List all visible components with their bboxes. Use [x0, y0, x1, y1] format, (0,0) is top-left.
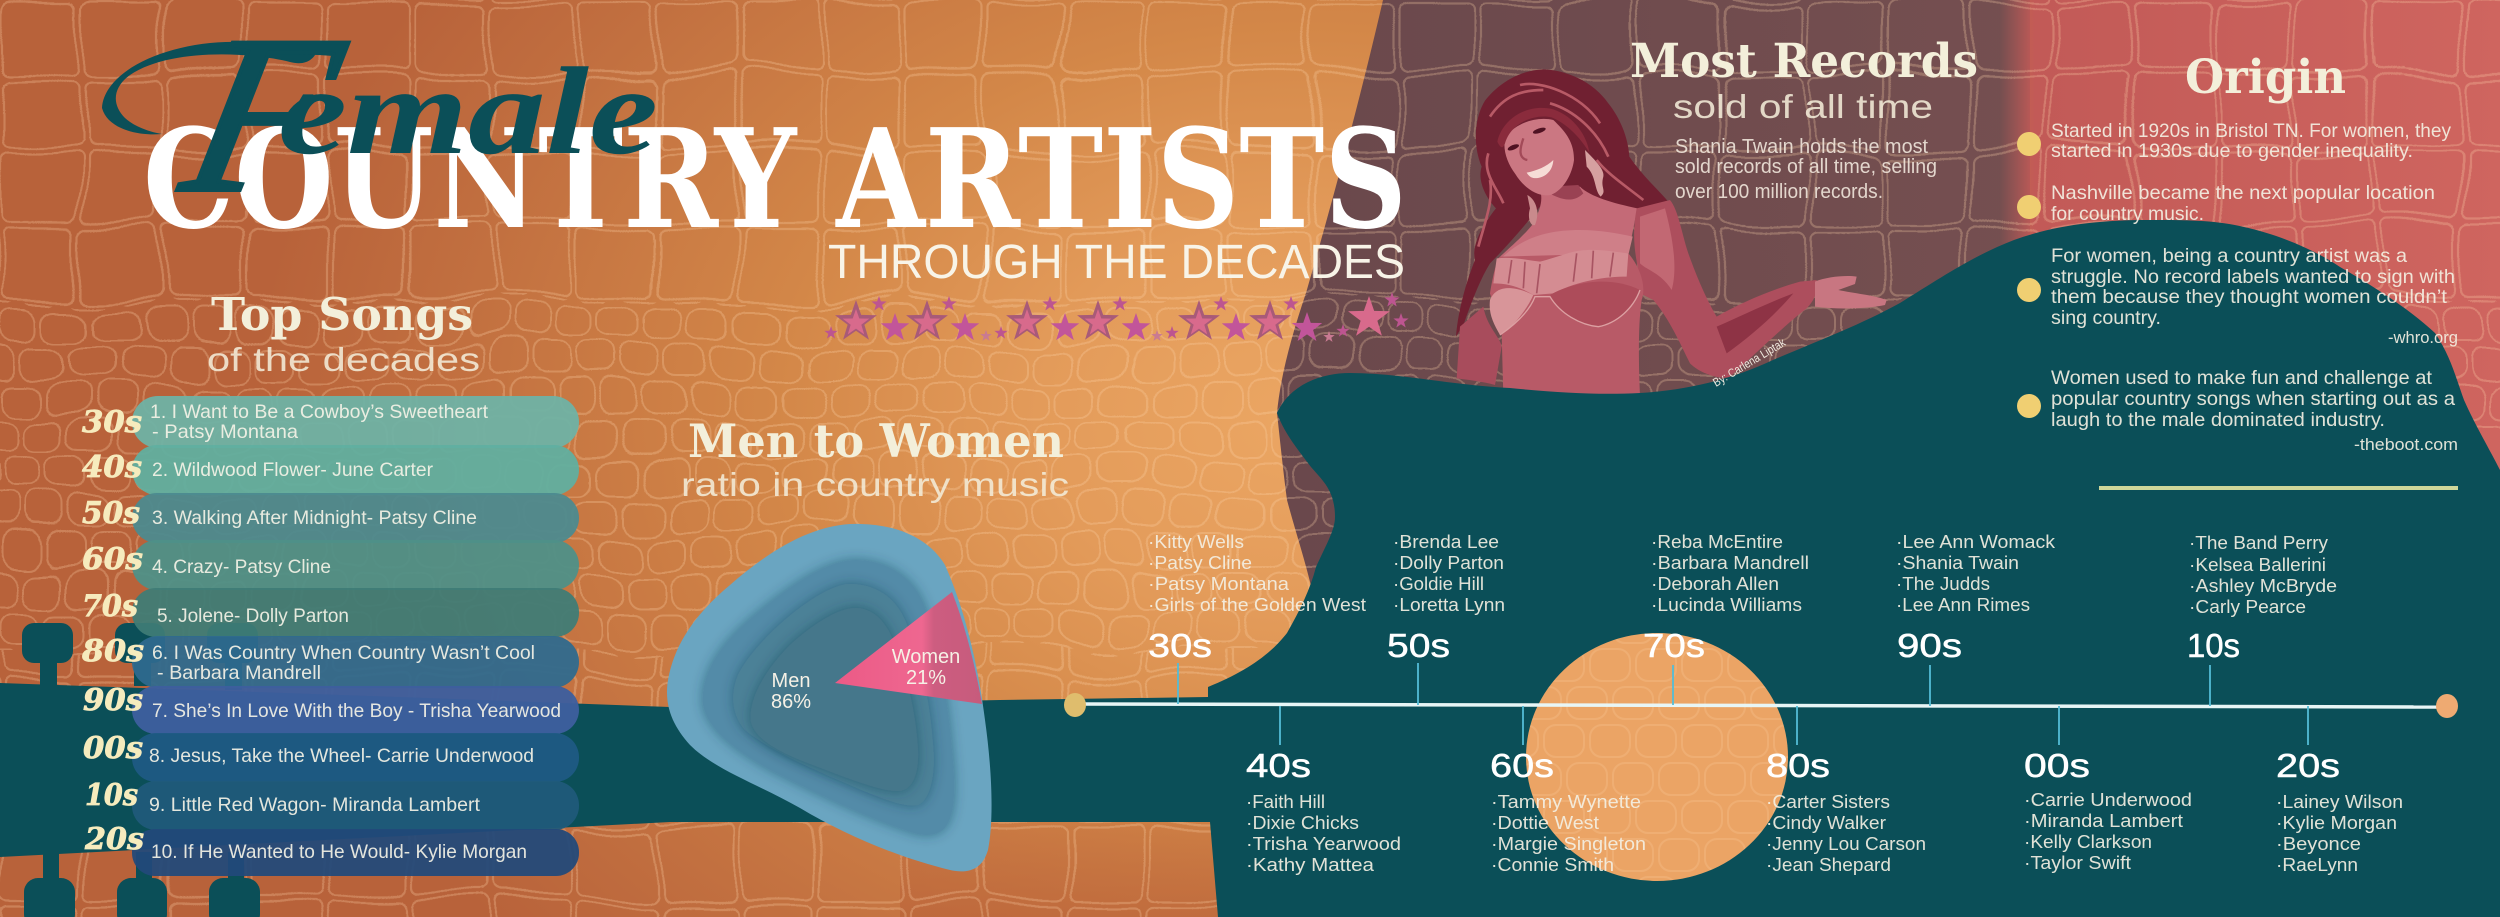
title [102, 0, 1407, 289]
label: men 86%: 86% [771, 691, 811, 713]
origin text: sing country. [2051, 307, 2161, 329]
artists: 70s [1651, 531, 1809, 615]
artists: 70s: ·Barbara Mandrell [1651, 552, 1809, 573]
artists: 90s: ·Shania Twain [1896, 552, 2019, 573]
chart: guitar pick pie [667, 524, 992, 871]
song titles [149, 401, 561, 863]
artists: 80s: ·Jenny Lou Carson [1766, 833, 1926, 854]
panel: red leather [2000, 0, 2500, 590]
decade labels: 70s [1643, 627, 1705, 664]
text: shania twain [1675, 136, 1937, 203]
artists: 40s: ·Dixie Chicks [1246, 812, 1359, 833]
song titles: 3. Walking After Midnight- Patsy Cline [152, 507, 477, 529]
decade labels: 90s [83, 683, 143, 718]
decade labels: 20s [84, 822, 144, 857]
artists: 00s: ·Carrie Underwood [2024, 789, 2192, 810]
bullets [2017, 132, 2041, 418]
artists: 10s: ·Ashley McBryde [2189, 575, 2337, 596]
heading: men to women: Men to Women [688, 414, 1064, 468]
subheading: sold of all time: sold of all time [1673, 88, 1933, 125]
label: men 86% [771, 670, 811, 713]
artists: 40s [1246, 791, 1401, 875]
credit: By: Carlena Liptak [1710, 335, 1789, 390]
icon: tuning pegs bottom [24, 852, 260, 917]
song titles: 7. She’s In Love With the Boy - Trisha Yearwood [152, 700, 561, 722]
heading: top songs: Top Songs [211, 288, 473, 341]
artists: 30s [1148, 531, 1366, 615]
heading: most records: Most Records [1630, 34, 1978, 89]
subheading: of the decades: of the decades [207, 341, 480, 378]
decade labels: 20s [2276, 747, 2340, 784]
decade labels: 00s [83, 731, 143, 766]
artists: 30s: ·Girls of the Golden West [1148, 594, 1366, 615]
origin text: them because they thought women couldn’t [2051, 286, 2448, 308]
decade labels: 30s [82, 405, 142, 440]
origin text: Women used to make fun and challenge at [2051, 367, 2433, 389]
song titles: 2. Wildwood Flower- June Carter [152, 459, 433, 481]
origin text: started in 1930s due to gender inequality. [2051, 140, 2413, 162]
decade labels: 70s [82, 589, 138, 624]
decade labels: 30s [1148, 627, 1212, 664]
song titles: 4. Crazy- Patsy Cline [152, 556, 331, 578]
subtitle: THROUGH THE DECADES [828, 236, 1405, 289]
origin text: struggle. No record labels wanted to sign with [2051, 266, 2455, 288]
heading: Female script: emale [278, 43, 658, 181]
artists: 50s [1393, 531, 1505, 615]
artists: 90s: ·Lee Ann Rimes [1896, 594, 2030, 615]
icon: tuning pegs top [22, 623, 258, 690]
song titles: 1. I Want to Be a Cowboy’s Sweetheart [150, 401, 489, 423]
origin text: -whro.org [2388, 328, 2458, 347]
portrait: Shania Twain [1456, 69, 1887, 397]
artists: 40s: ·Faith Hill [1246, 791, 1325, 812]
label: men 86%: Men [772, 670, 810, 692]
song titles: 9. Little Red Wagon- Miranda Lambert [149, 794, 481, 816]
origin text [2051, 120, 2458, 454]
decade labels: 80s [81, 634, 144, 669]
song titles: 5. Jolene- Dolly Parton [157, 605, 349, 627]
sound hole [1526, 633, 1788, 881]
heading: Female script [102, 0, 658, 239]
artists: 90s: ·The Judds [1896, 573, 1990, 594]
song titles: 8. Jesus, Take the Wheel- Carrie Underwood [149, 745, 534, 767]
artists: 60s: ·Dottie West [1491, 812, 1599, 833]
panel: origin [2017, 50, 2458, 490]
timeline axis [1064, 693, 2458, 718]
decade labels: 40s [1246, 747, 1311, 784]
artists: 00s [2024, 789, 2192, 873]
decade labels: 40s [82, 450, 142, 485]
artists: 60s: ·Margie Singleton [1491, 833, 1646, 854]
divider line [2099, 486, 2458, 490]
artists: 80s [1766, 791, 1926, 875]
text: shania twain: over 100 million records. [1675, 181, 1883, 203]
artists: 70s: ·Lucinda Williams [1651, 594, 1802, 615]
artists: 80s: ·Carter Sisters [1766, 791, 1890, 812]
song pills [132, 396, 579, 876]
artists: 50s: ·Loretta Lynn [1393, 594, 1505, 615]
artists: 60s: ·Tammy Wynette [1491, 791, 1641, 812]
panel: top songs [81, 288, 579, 876]
origin text: For women, being a country artist was a [2051, 245, 2407, 267]
artists: 60s [1491, 791, 1646, 875]
decade labels: 10s [85, 778, 138, 813]
women slice [835, 592, 982, 704]
artists: 80s: ·Cindy Walker [1766, 812, 1886, 833]
origin text: -theboot.com [2354, 435, 2458, 454]
heading: origin: Origin [2185, 50, 2346, 105]
artists: 70s: ·Deborah Allen [1651, 573, 1779, 594]
label: women 21%: Women [892, 646, 960, 668]
artists: 80s: ·Jean Shepard [1766, 854, 1891, 875]
decade labels [1148, 627, 2340, 784]
timeline ticks [1178, 663, 2308, 745]
decade labels: 10s [2187, 627, 2240, 664]
artists: 30s: ·Patsy Cline [1148, 552, 1252, 573]
artists: 50s: ·Brenda Lee [1393, 531, 1499, 552]
artists: 10s: ·The Band Perry [2189, 532, 2329, 553]
artists: 50s: ·Dolly Parton [1393, 552, 1504, 573]
song titles: 6. I Was Country When Country Wasn’t Cool [152, 642, 535, 664]
song titles: 10. If He Wanted to He Would- Kylie Morgan [151, 841, 527, 863]
song titles: - Barbara Mandrell [157, 662, 321, 684]
artists: 90s [1896, 531, 2056, 615]
artists: 20s [2276, 791, 2403, 875]
origin text: for country music. [2051, 203, 2204, 225]
artists: 60s: ·Connie Smith [1491, 854, 1614, 875]
artists: 10s: ·Carly Pearce [2189, 596, 2306, 617]
decade labels: 60s [82, 542, 143, 577]
panel: most records [1630, 34, 1978, 203]
decade labels: 80s [1766, 747, 1830, 784]
text: shania twain: sold records of all time, selling [1675, 156, 1937, 178]
artists: 20s: ·RaeLynn [2276, 854, 2358, 875]
artists: 00s: ·Taylor Swift [2024, 852, 2131, 873]
timeline [1064, 531, 2458, 875]
artists: 20s: ·Kylie Morgan [2276, 812, 2397, 833]
artists: 90s: ·Lee Ann Womack [1896, 531, 2056, 552]
decade labels: 00s [2024, 747, 2090, 784]
decade labels: 90s [1897, 627, 1962, 664]
artists: 20s: ·Beyonce [2276, 833, 2361, 854]
label: women 21%: 21% [906, 667, 946, 689]
origin text: Nashville became the next popular location [2051, 182, 2435, 204]
artists: 30s: ·Kitty Wells [1148, 531, 1244, 552]
decade labels: 50s [1387, 627, 1450, 664]
decade labels [81, 405, 144, 857]
panel: brown leather [1277, 0, 2030, 590]
heading: country artists: COUNTRY ARTISTS [143, 99, 1407, 260]
guitar body, neck and headstock [0, 220, 2500, 917]
artists: 00s: ·Miranda Lambert [2024, 810, 2183, 831]
subheading: ratio: ratio in country music [681, 466, 1069, 503]
text: shania twain: Shania Twain holds the most [1675, 136, 1928, 158]
decade labels: 50s [82, 496, 140, 531]
artists: 00s: ·Kelly Clarkson [2024, 831, 2152, 852]
artists: 40s: ·Trisha Yearwood [1246, 833, 1401, 854]
artists: 70s: ·Reba McEntire [1651, 531, 1783, 552]
star divider [824, 292, 1409, 342]
artists: 10s: ·Kelsea Ballerini [2189, 554, 2326, 575]
origin text: laugh to the male dominated industry. [2051, 409, 2385, 431]
origin text: Started in 1920s in Bristol TN. For women, they [2051, 120, 2451, 142]
origin text: popular country songs when starting out as a [2051, 388, 2455, 410]
artists: 30s: ·Patsy Montana [1148, 573, 1290, 594]
decade labels: 60s [1490, 747, 1554, 784]
label: women 21% [892, 646, 960, 689]
song titles: - Patsy Montana [152, 421, 298, 443]
artists: 20s: ·Lainey Wilson [2276, 791, 2403, 812]
artists: 10s [2189, 532, 2337, 617]
artists: 40s: ·Kathy Mattea [1246, 854, 1375, 875]
panel: men to women [667, 414, 1069, 871]
artists: 50s: ·Goldie Hill [1393, 573, 1484, 594]
